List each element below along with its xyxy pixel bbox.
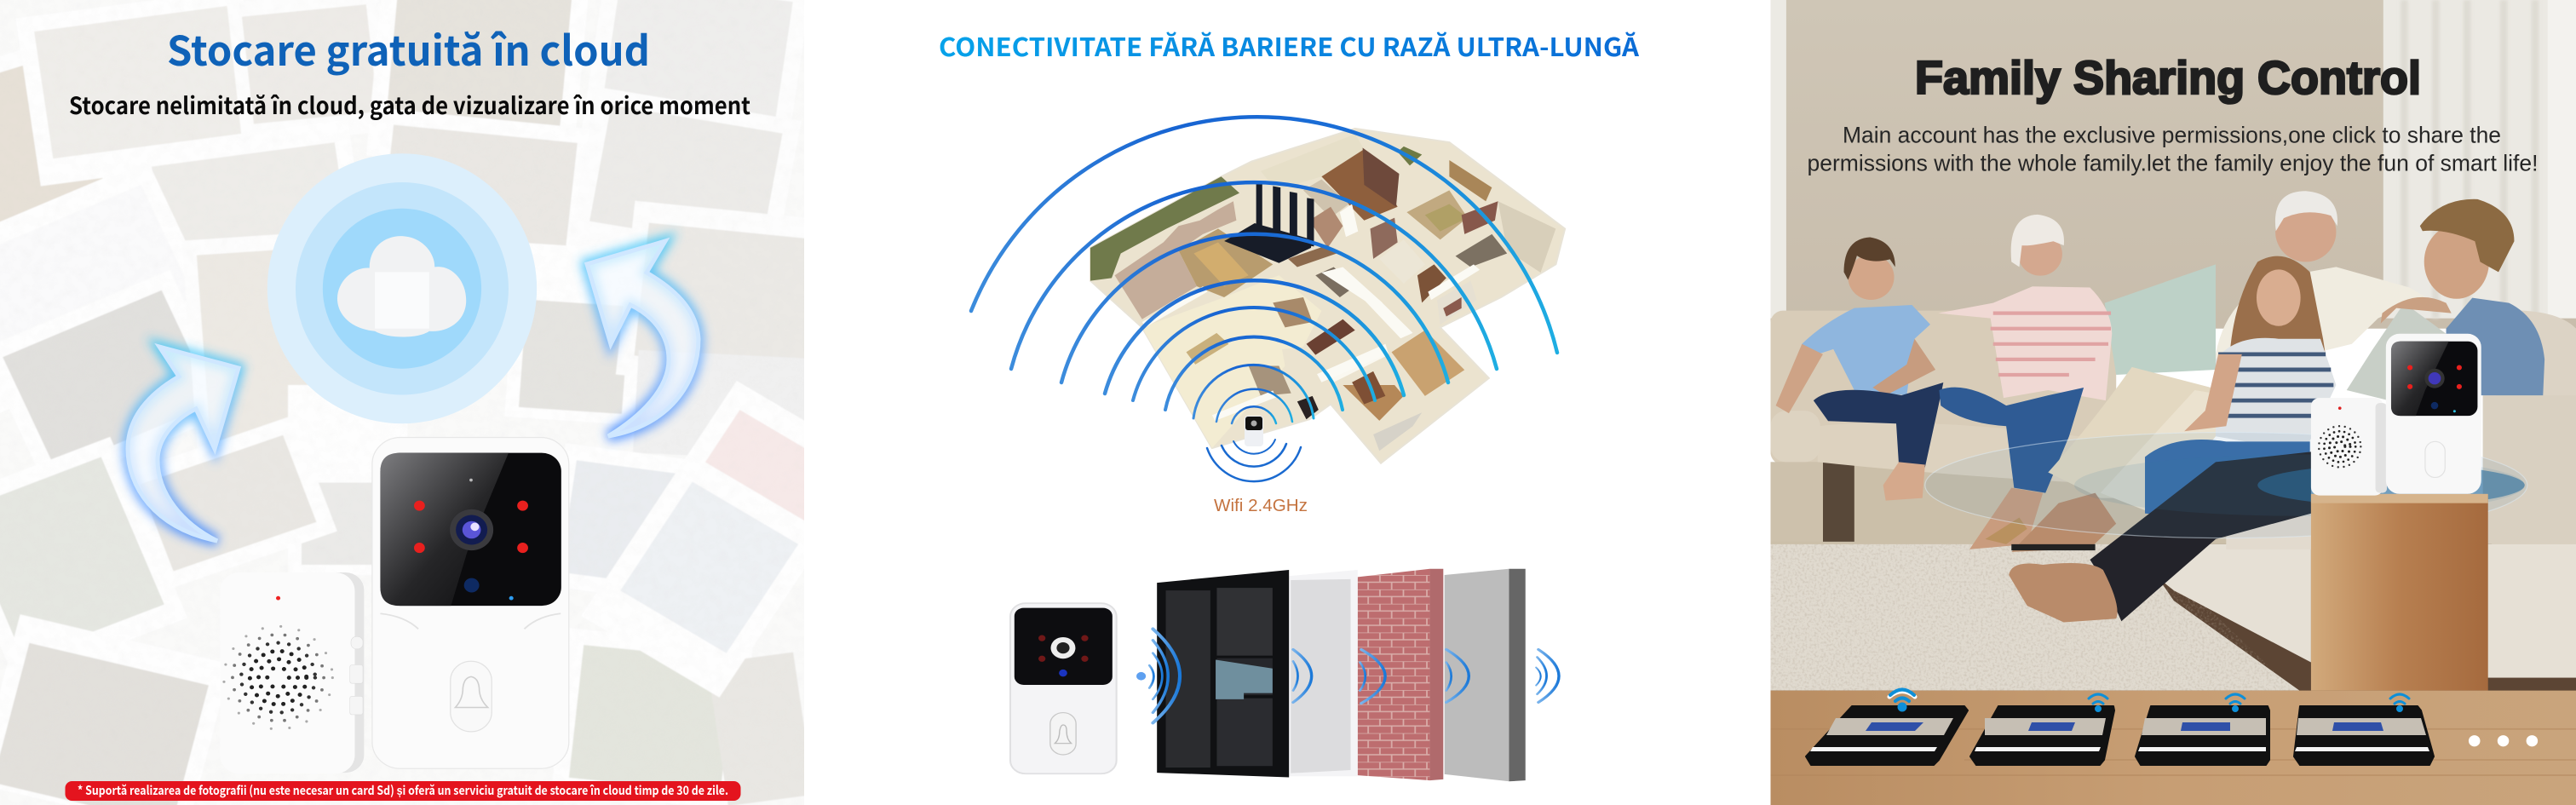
wifi arcs xyxy=(971,117,1557,481)
mini doorbell xyxy=(1245,416,1263,446)
grandmother xyxy=(1938,215,2112,549)
phone 2 xyxy=(1970,706,2114,765)
wave arcs through barriers xyxy=(1136,629,1559,723)
phones xyxy=(1806,706,2434,765)
doorbell device xyxy=(2386,334,2481,494)
footnote pill: * Suportă realizarea de fotografii (nu este necesar un card Sd) și oferă un serviciu gratuit de stocare în cloud timp de 30 de zile. xyxy=(78,781,728,799)
wifi icons xyxy=(1889,690,2409,710)
girl xyxy=(2145,256,2336,516)
living room scene xyxy=(1770,0,2576,805)
phone 1 xyxy=(1806,706,1968,765)
signal ellipses xyxy=(1925,432,2527,538)
pagination dots xyxy=(2469,735,2538,746)
panel: family sharing xyxy=(1770,0,2576,805)
black door xyxy=(1157,570,1289,777)
wifi label: Wifi 2.4GHz xyxy=(1214,496,1308,515)
barriers: door and walls xyxy=(1157,569,1526,781)
photo collage background xyxy=(0,0,875,805)
phone 3 xyxy=(2136,706,2269,765)
icon: cloud with concentric circles xyxy=(267,153,537,423)
icon: router xyxy=(1224,182,1314,263)
chime speaker device xyxy=(220,572,364,773)
boy xyxy=(1776,237,1943,501)
panel: wireless range xyxy=(939,26,1640,781)
description xyxy=(1808,123,2539,175)
arrow: right upload xyxy=(587,241,699,436)
floor plan xyxy=(1090,129,1565,463)
grey wall xyxy=(1445,569,1526,781)
phone 4 xyxy=(2294,706,2434,765)
chime device xyxy=(2311,398,2387,496)
doorbell device xyxy=(1010,603,1117,773)
grandfather xyxy=(2011,191,2435,552)
subtitle: Stocare nelimitată în cloud, gata de vizualizare în orice moment xyxy=(69,87,750,121)
sofa xyxy=(1770,310,2576,678)
title: CONECTIVITATE FĂRĂ BARIERE CU RAZĂ ULTRA-LUNGĂ xyxy=(939,26,1640,64)
brick wall xyxy=(1358,569,1443,780)
panel: cloud storage xyxy=(0,0,875,805)
description: permissions with the whole family.let the family enjoy the fun of smart life! xyxy=(1808,150,2539,175)
title: Family Sharing Control xyxy=(1915,51,2421,104)
white door xyxy=(1289,570,1358,776)
doorbell device xyxy=(372,438,569,768)
side table xyxy=(2311,494,2488,691)
arrow: left upload xyxy=(128,347,239,541)
description: Main account has the exclusive permissions,one click to share the xyxy=(1843,123,2501,148)
title: Stocare gratuită în cloud xyxy=(167,18,650,78)
man xyxy=(2009,199,2544,622)
pillows xyxy=(2105,264,2447,400)
wall and curtains xyxy=(1770,0,2576,329)
floor and rug xyxy=(1770,534,2576,693)
wooden table xyxy=(1770,691,2576,805)
